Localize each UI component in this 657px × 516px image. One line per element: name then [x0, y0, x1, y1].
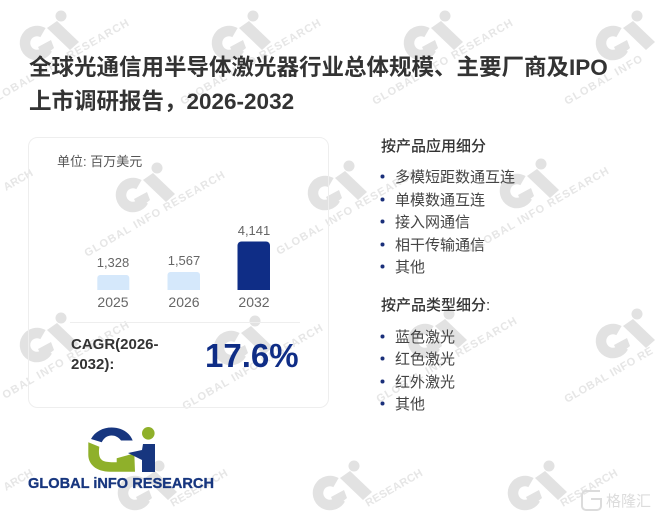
CAGR value: 17.6% [205, 337, 299, 374]
list [380, 169, 515, 276]
bar: 2032: 2032 [238, 294, 270, 310]
bar: 2032 [238, 223, 270, 310]
text: GLOBAL INFO RESEARCH [180, 322, 325, 413]
heading: 按产品类型细分: [381, 296, 490, 314]
panel: segmentation by type [380, 296, 490, 413]
text: GLOBAL INFO RESEARCH [82, 169, 227, 260]
logo wordmark: GLOBAL iNFO RESEARCH [28, 475, 214, 492]
text: GLOBAL INFO RESEARCH [178, 17, 323, 108]
text: OBAL INFO RESEARCH [1, 319, 131, 402]
bar: 2026 [168, 253, 200, 310]
list: 其他 [395, 259, 425, 276]
text: RESEARCH [364, 467, 425, 510]
source watermark: Gelonghui [582, 491, 651, 510]
text: GLOBAL INFO RE [562, 345, 655, 406]
list [380, 329, 455, 413]
text: ARCH [2, 467, 35, 494]
list: 红色激光 [395, 351, 455, 368]
text: RESEARCH [558, 467, 620, 510]
source watermark: Gelonghui: 格隆汇 [606, 493, 651, 510]
list: 多模短距数通互连 [395, 169, 515, 186]
heading: 按产品应用细分 [381, 137, 486, 155]
bar chart [97, 223, 270, 310]
text: GLOBAL INFO RESEARCH [466, 165, 611, 256]
text: GLOBAL INFO RESEARCH [274, 167, 419, 258]
title [29, 55, 608, 114]
list: 其他 [395, 396, 425, 413]
list: 单模数通互连 [395, 192, 485, 209]
text: GLOBAL INFO RESEARCH [374, 315, 519, 406]
title: 上市调研报告，2026-2032 [29, 88, 294, 114]
title: 全球光通信用半导体激光器行业总体规模、主要厂商及IPO [29, 55, 608, 80]
CAGR label: 2032): [71, 356, 114, 373]
list: 接入网通信 [395, 214, 470, 231]
logo: Global Info Research [28, 427, 214, 492]
text: GLOBAL INFO [562, 53, 645, 108]
text: RESEARCH [168, 467, 230, 510]
list: 蓝色激光 [395, 329, 455, 346]
list: 相干传输通信 [395, 237, 485, 254]
panel: segmentation by application [380, 137, 515, 276]
bar: 2025: 2025 [97, 294, 129, 310]
bar: 2025 [97, 255, 129, 310]
text: GLOBAL INFO RESEARCH [370, 17, 515, 108]
icon: Gi mark [88, 427, 155, 472]
bar: 2026: 1,567 [168, 253, 200, 268]
bar: 2025: 1,328 [97, 255, 129, 270]
CAGR label [71, 336, 159, 373]
bar: 2026: 2026 [168, 294, 200, 310]
list: 红外激光 [395, 374, 455, 391]
text: ARCH [2, 167, 35, 194]
panel: market size card [28, 138, 328, 408]
CAGR label: CAGR(2026- [71, 336, 159, 353]
bar: 2032: 4,141 [238, 223, 270, 238]
unit label: 单位: 百万美元 [57, 154, 142, 169]
